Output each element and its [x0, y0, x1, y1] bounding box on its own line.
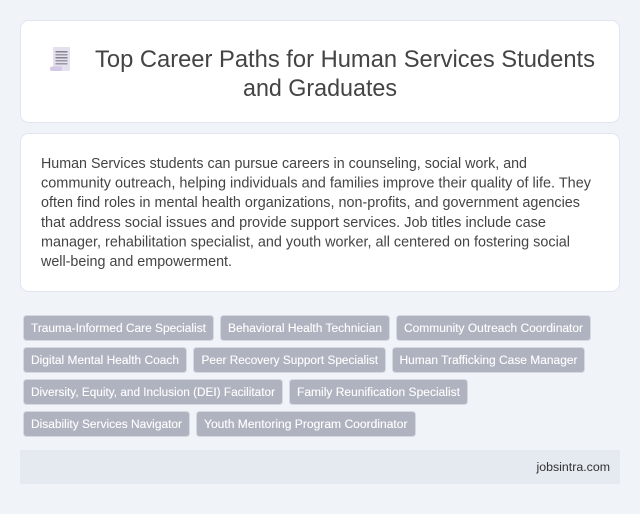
tag — [24, 348, 186, 372]
description text: often find roles in mental health organizations, non-profits, and government agencies — [41, 195, 580, 211]
description text: community outreach, helping individuals and families improve their quality of life. They — [41, 176, 592, 192]
tag — [396, 316, 590, 340]
description text: well-being and empowerment. — [40, 254, 232, 270]
tag — [24, 412, 190, 436]
description text — [40, 156, 592, 270]
title: and Graduates — [243, 75, 397, 102]
tag: Peer Recovery Support Specialist — [202, 353, 379, 367]
tag — [24, 380, 282, 404]
title — [95, 46, 595, 102]
tag: Diversity, Equity, and Inclusion (DEI) Facilitator — [31, 385, 275, 399]
icon: paper scroll — [50, 47, 70, 71]
tag: Family Reunification Specialist — [297, 385, 461, 399]
title: Top Career Paths for Human Services Students — [95, 46, 595, 73]
tag: Behavioral Health Technician — [228, 321, 382, 335]
tag — [392, 348, 584, 372]
footer bar — [20, 450, 620, 484]
tag — [194, 348, 386, 372]
description text: manager, rehabilitation specialist, and youth worker, all centered on fostering social — [41, 234, 570, 250]
career tags — [24, 316, 590, 436]
tag — [290, 380, 468, 404]
header panel — [20, 20, 620, 122]
tag — [196, 412, 416, 436]
description panel — [20, 134, 620, 292]
footer source text: jobsintra.com — [536, 460, 610, 474]
tag: Trauma-Informed Care Specialist — [31, 321, 207, 335]
tag — [220, 316, 390, 340]
description text: that address social issues and provide support services. Job titles include case — [41, 215, 546, 231]
tag — [24, 316, 214, 340]
tag: Disability Services Navigator — [31, 417, 182, 431]
tag: Digital Mental Health Coach — [31, 353, 179, 367]
description text: Human Services students can pursue careers in counseling, social work, and — [41, 156, 527, 172]
tag: Community Outreach Coordinator — [404, 321, 583, 335]
tag: Human Trafficking Case Manager — [400, 353, 578, 367]
tag: Youth Mentoring Program Coordinator — [204, 417, 408, 431]
